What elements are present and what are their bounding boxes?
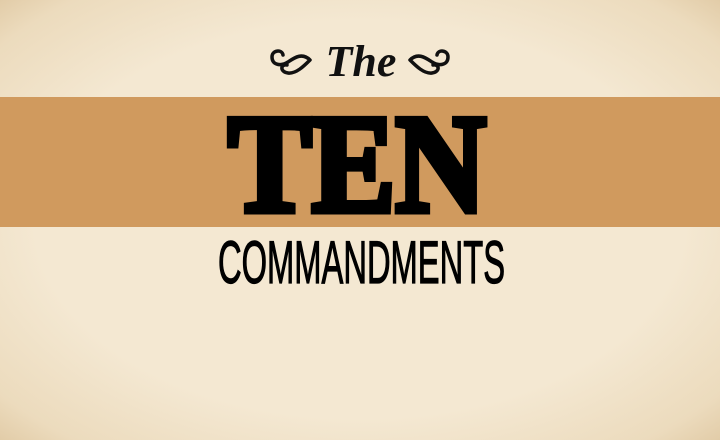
heading: The with flourishes: [272, 37, 448, 86]
banner band: [0, 97, 720, 227]
flourish right: [410, 51, 448, 73]
word The: The: [326, 37, 396, 86]
flourish left: [272, 51, 310, 73]
title: TEN: TEN: [228, 87, 486, 242]
